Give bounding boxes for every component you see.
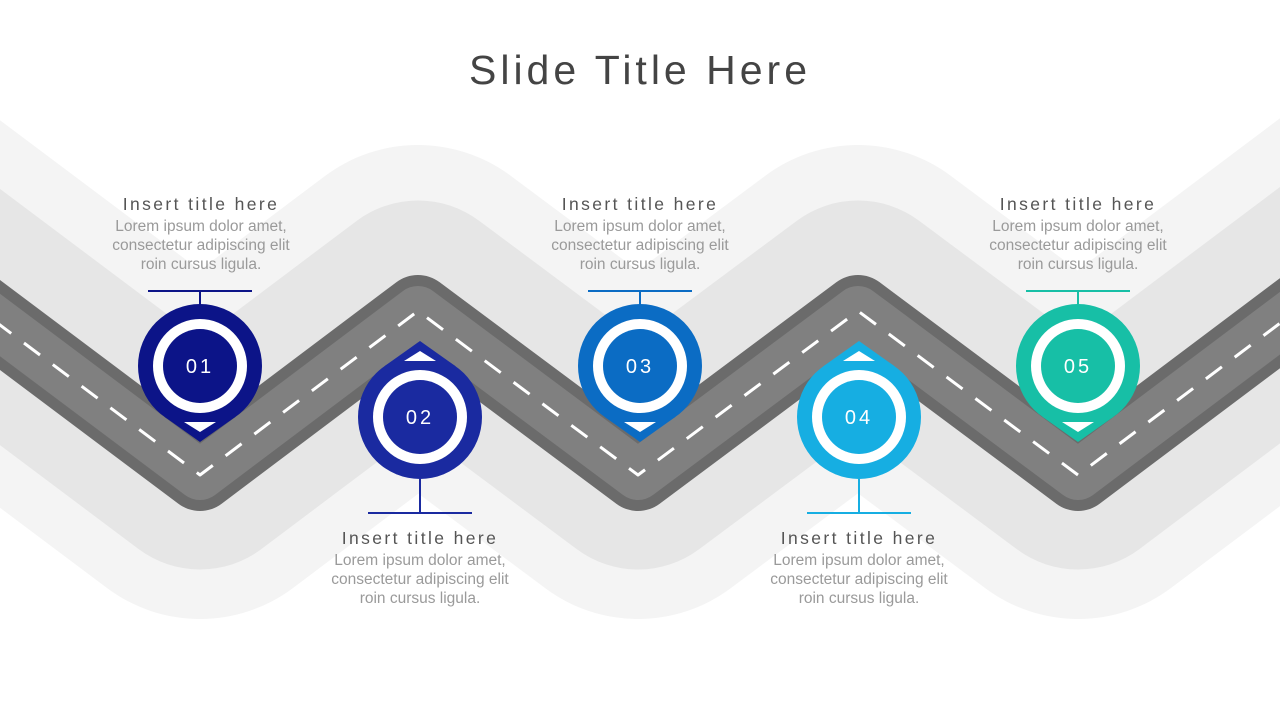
text block 04: Lorem ipsum dolor amet, xyxy=(773,552,945,569)
text block 02: consectetur adipiscing elit xyxy=(331,571,509,588)
pin 01 xyxy=(138,304,262,442)
pin 03 xyxy=(578,304,702,442)
text block 04: consectetur adipiscing elit xyxy=(770,571,948,588)
text block 03: Lorem ipsum dolor amet, xyxy=(554,218,726,235)
pin 02: 02 xyxy=(406,407,434,429)
text block 04 xyxy=(770,528,948,607)
text block 01 xyxy=(112,194,290,273)
text block 01: Lorem ipsum dolor amet, xyxy=(115,218,287,235)
text block 01: Insert title here xyxy=(123,194,279,214)
text block 02: Lorem ipsum dolor amet, xyxy=(334,552,506,569)
text block 05 xyxy=(989,194,1167,273)
text block 05: roin cursus ligula. xyxy=(1018,256,1138,273)
connector 03 xyxy=(588,291,692,305)
pin 04 xyxy=(797,341,921,479)
pin 02 xyxy=(358,341,482,479)
connector 02 xyxy=(368,479,472,513)
text block 02: roin cursus ligula. xyxy=(360,590,480,607)
pin 03: 03 xyxy=(626,356,654,378)
text block 02 xyxy=(331,528,509,607)
text block 04: Insert title here xyxy=(781,528,937,548)
pin 05 xyxy=(1016,304,1140,442)
text block 03: roin cursus ligula. xyxy=(580,256,700,273)
text block 05: Lorem ipsum dolor amet, xyxy=(992,218,1164,235)
text block 04: roin cursus ligula. xyxy=(799,590,919,607)
pin 01: 01 xyxy=(186,356,214,378)
text block 01: consectetur adipiscing elit xyxy=(112,237,290,254)
connector 01 xyxy=(148,291,252,305)
background band inner xyxy=(0,225,1280,467)
road xyxy=(0,233,1280,475)
text block 05: consectetur adipiscing elit xyxy=(989,237,1167,254)
text block 02: Insert title here xyxy=(342,528,498,548)
text block 03: Insert title here xyxy=(562,194,718,214)
pin 04: 04 xyxy=(845,407,873,429)
text block 01: roin cursus ligula. xyxy=(141,256,261,273)
text block 03: consectetur adipiscing elit xyxy=(551,237,729,254)
connector 04 xyxy=(807,479,911,513)
text block 03 xyxy=(551,194,729,273)
background band outer xyxy=(0,222,1280,464)
text block 05: Insert title here xyxy=(1000,194,1156,214)
connector 05 xyxy=(1026,291,1130,305)
title: Slide Title Here xyxy=(469,47,811,93)
pin 05: 05 xyxy=(1064,356,1092,378)
